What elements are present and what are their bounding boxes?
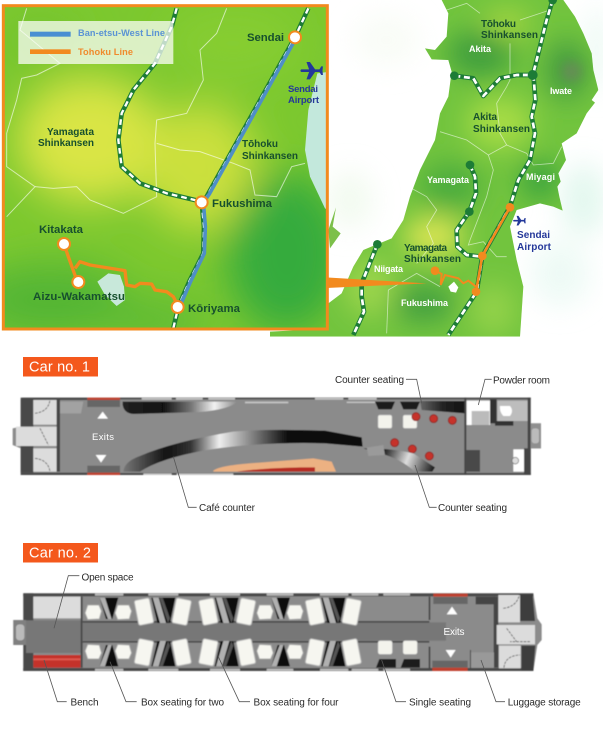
- rear wall: [464, 398, 466, 475]
- map labels: regional: Miyagi: [526, 172, 555, 182]
- labels: car 2: [70, 572, 581, 708]
- map labels: regional: [374, 19, 572, 308]
- kitchen tan area: [213, 458, 336, 472]
- labels: car 1: Café counter: [199, 503, 256, 514]
- orange Tohoku line: [64, 250, 177, 302]
- labels: car 2: Open space: [82, 572, 134, 584]
- wall edges: [21, 398, 531, 475]
- icon: airplane: [300, 62, 323, 79]
- island: Sado: [328, 207, 341, 248]
- map labels: inset: Tōhoku: [242, 139, 278, 150]
- labels: car 2: Single seating: [409, 698, 471, 708]
- badge: Car no. 2: [23, 543, 98, 562]
- badge: Car no. 1: [23, 357, 98, 376]
- badge: Car no. 1: Car no. 1: [29, 360, 90, 376]
- exit text: Exits: [444, 627, 464, 638]
- map labels: inset: Tohoku Line: [78, 47, 133, 57]
- exit arrows: [96, 412, 108, 463]
- map labels: inset: Airport: [288, 95, 320, 106]
- map labels: inset: Shinkansen: [38, 138, 94, 149]
- leader lines: car 2: [44, 576, 505, 702]
- left vestibule: [16, 400, 58, 472]
- luggage and right vestibule: [470, 594, 535, 670]
- labels: car 2: Box seating for four: [254, 698, 339, 708]
- white seats: [378, 415, 417, 428]
- map labels: regional: Niigata: [374, 264, 404, 274]
- sea wash: [327, 7, 603, 307]
- prefecture borders: [7, 8, 305, 217]
- labels: car 1: Counter seating: [438, 503, 507, 514]
- map labels: regional: Akita: [473, 112, 497, 123]
- car body: [13, 398, 541, 475]
- upper curved bench: [123, 402, 237, 414]
- map labels: inset: Fukushima: [212, 198, 273, 210]
- floor plan: car 2: [13, 593, 542, 671]
- map labels: inset: Sendai: [247, 32, 284, 44]
- map labels: regional: Tōhoku: [481, 19, 516, 30]
- single seating: [376, 641, 420, 668]
- map labels: inset: [33, 28, 320, 315]
- panel: inset map: [0, 0, 347, 340]
- map labels: inset: Shinkansen: [242, 151, 298, 162]
- leader lines: car 1: [173, 379, 492, 507]
- labels: car 2: Bench: [70, 698, 98, 708]
- badge: Car no. 2: Car no. 2: [29, 546, 91, 562]
- lake: [97, 273, 125, 306]
- lake: [448, 282, 458, 293]
- map labels: inset: Ban-etsu-West Line: [78, 28, 165, 38]
- blue Ban-etsu-West line: [179, 38, 296, 307]
- stations: [58, 31, 301, 313]
- map labels: regional: Airport: [517, 242, 552, 253]
- inset frame: [3, 6, 327, 329]
- map labels: regional: Sendai: [517, 230, 550, 241]
- map labels: regional: Fukushima: [401, 298, 449, 308]
- labels: car 2: Box seating for two: [141, 698, 224, 708]
- map labels: regional: Shinkansen: [473, 124, 530, 135]
- green station dots: [373, 0, 557, 249]
- prefecture borders: [387, 3, 562, 333]
- inset terrain: [4, 7, 326, 328]
- legend box: [18, 21, 173, 64]
- right end: [466, 398, 541, 475]
- lower curved cafe counter: [123, 430, 363, 472]
- powder room: [467, 399, 528, 426]
- aisle: [83, 621, 446, 643]
- callout wedge: [313, 277, 427, 289]
- labels: car 1: [199, 375, 550, 514]
- map labels: inset: Kitakata: [39, 224, 84, 236]
- exit section: [429, 594, 468, 671]
- open space: [13, 597, 83, 668]
- map labels: inset: Aizu-Wakamatsu: [33, 291, 125, 303]
- labels: car 2: Luggage storage: [508, 698, 581, 708]
- panel: regional map: [267, 0, 603, 340]
- map labels: regional: Yamagata: [427, 175, 470, 185]
- exit text: [92, 432, 464, 638]
- map labels: regional: Yamagata: [404, 243, 447, 254]
- map labels: regional: Shinkansen: [481, 30, 538, 41]
- orange route: [431, 203, 514, 296]
- car body: [13, 593, 542, 671]
- red stools: [391, 413, 456, 460]
- floor plan: car 1: [13, 398, 541, 475]
- curved counter end: [363, 448, 435, 472]
- map labels: inset: Kōriyama: [188, 303, 241, 315]
- wall edges: [23, 593, 533, 671]
- bottom seating: [85, 638, 362, 666]
- icon: airplane: [513, 216, 526, 225]
- shinkansen lines: [118, 8, 308, 328]
- shinkansen lines: [353, 0, 553, 335]
- top seating: [85, 598, 362, 626]
- exit doors: [60, 398, 120, 475]
- land mass: [267, 0, 603, 340]
- map labels: regional: Iwate: [550, 86, 572, 96]
- exit text: Exits: [92, 432, 114, 443]
- map labels: inset: Yamagata: [47, 127, 94, 138]
- map labels: regional: Shinkansen: [404, 254, 461, 265]
- window strips: [142, 398, 377, 475]
- labels: car 1: Counter seating: [335, 375, 404, 386]
- counter seating top: [375, 402, 420, 409]
- map labels: inset: Sendai: [288, 84, 318, 95]
- window strips: [95, 594, 410, 671]
- map labels: regional: Akita: [469, 44, 492, 54]
- labels: car 1: Powder room: [493, 376, 550, 386]
